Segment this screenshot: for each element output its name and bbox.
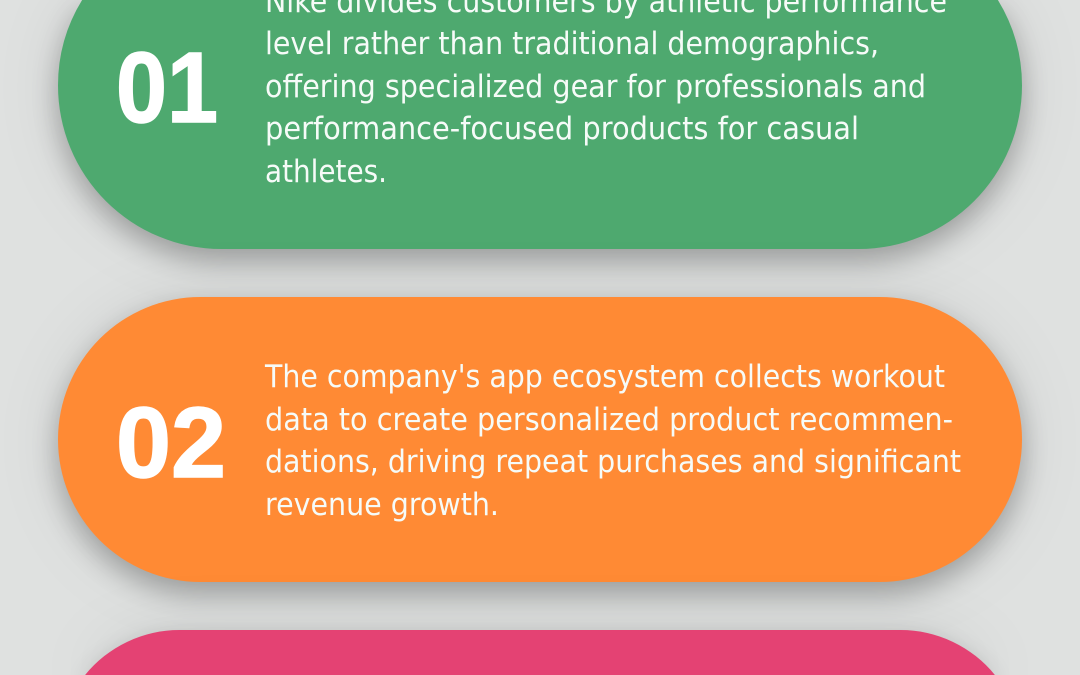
text block: step 02 description: dations, driving repeat purchases and significant	[265, 444, 961, 480]
number 02: 02	[116, 387, 226, 499]
text block: step 02 description	[264, 359, 961, 523]
text block: step 02 description: The company's app ecosystem collects workout	[264, 359, 945, 395]
text block: step 01 description	[265, 0, 947, 190]
text block: step 01 description: offering specialized gear for professionals and	[265, 69, 926, 105]
text block: step 01 description: performance-focused products for casual	[265, 111, 859, 147]
number 01: 01	[116, 32, 218, 144]
text block: step 01 description: level rather than traditional demographics,	[265, 26, 879, 62]
text block: step 01 description: athletes.	[265, 154, 387, 190]
panel: step 03 pink pill	[85, 630, 995, 675]
text block: step 02 description: data to create personalized product recommen-	[265, 402, 953, 438]
text block: step 02 description: revenue growth.	[265, 487, 499, 523]
panel: step 01 green pill	[58, 0, 1022, 249]
panel: step 02 orange pill	[58, 297, 1022, 582]
